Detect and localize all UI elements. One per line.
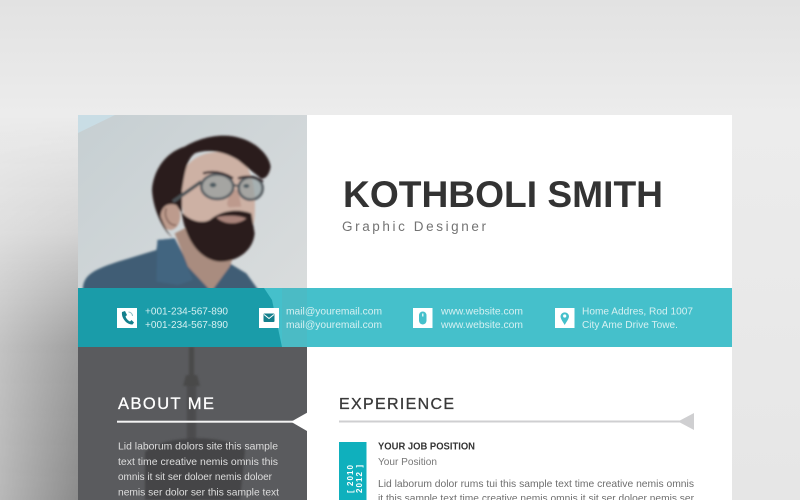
postal address — [582, 306, 693, 331]
date block — [339, 442, 366, 500]
beard — [181, 211, 255, 262]
phone numbers: +001-234-567-890 — [145, 319, 228, 331]
icon: phone — [117, 308, 137, 328]
heading rule with notch — [117, 413, 307, 431]
postal address: City Ame Drive Towe. — [582, 319, 678, 331]
face — [180, 150, 256, 226]
ear — [160, 202, 180, 230]
about text: text time creative nemis omnis this — [118, 456, 278, 468]
background photo: tripod — [145, 347, 245, 500]
icon: map pin — [555, 308, 574, 328]
website addresses: www.website.com — [440, 319, 523, 331]
job entry — [378, 440, 694, 500]
subtitle: job title: Graphic Designer — [342, 219, 486, 234]
title: name: KOTHBOLI SMITH — [343, 174, 663, 215]
postal address: Home Addres, Rod 1007 — [582, 306, 693, 318]
phone numbers: +001-234-567-890 — [145, 306, 228, 318]
neck — [175, 227, 235, 292]
email addresses: mail@youremail.com — [286, 306, 382, 318]
job entry: YOUR JOB POSITION — [378, 440, 475, 452]
date block: 2012 ] — [355, 465, 364, 493]
icon: envelope — [259, 308, 279, 328]
about text — [118, 440, 279, 498]
background — [0, 181, 78, 500]
about text: Lid laborum dolors site this sample — [118, 440, 278, 452]
heading rule with arrow — [339, 413, 694, 430]
phone contact — [117, 306, 228, 331]
email addresses: mail@youremail.com — [286, 319, 382, 331]
date block: [ 2010 — [346, 464, 355, 493]
glasses — [201, 174, 263, 200]
website addresses: www.website.com — [440, 306, 523, 318]
job entry: Lid laborum dolor rums tui this sample text time creative nemis omnis — [378, 478, 694, 490]
phone numbers — [145, 306, 228, 331]
about text: nemis ser dolor ser this sample text — [118, 486, 279, 498]
email contact — [259, 306, 382, 331]
icon: mouse — [413, 308, 432, 328]
shirt — [82, 240, 259, 288]
about text: omnis it sit ser doloer nemis doloer — [118, 471, 272, 483]
job entry: Your Position — [378, 456, 437, 468]
contact bar — [78, 288, 732, 347]
email addresses — [286, 306, 382, 331]
heading: about me: ABOUT ME — [118, 395, 214, 413]
address contact — [555, 306, 693, 331]
resume page — [78, 115, 732, 500]
portrait photo — [78, 115, 307, 288]
panel: about me — [78, 347, 307, 500]
panel: experience — [339, 396, 694, 500]
heading: experience: EXPERIENCE — [339, 396, 454, 413]
website contact — [413, 306, 523, 331]
website addresses — [440, 306, 523, 331]
nose shadow — [227, 190, 241, 207]
hair — [152, 136, 271, 238]
